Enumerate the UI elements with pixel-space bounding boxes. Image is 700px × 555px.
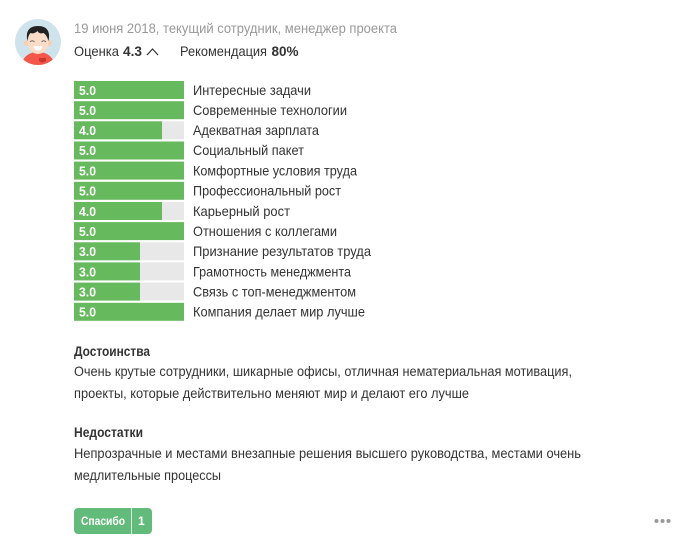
row: Профессиональный рост xyxy=(74,182,342,200)
row: Отношения с коллегами: 5.0 xyxy=(79,224,96,239)
row: Интересные задачи xyxy=(74,81,311,99)
row: Комфортные условия труда: 5.0 xyxy=(79,164,96,178)
rating summary: 4.3 xyxy=(123,43,142,59)
row: Современные технологии: Современные технологии xyxy=(193,102,347,118)
row: Признание результатов труда: Признание результатов труда xyxy=(193,243,371,259)
row: Карьерный рост: Карьерный рост xyxy=(193,203,291,219)
row: Грамотность менеджмента: Грамотность менеджмента xyxy=(193,264,351,280)
row: Интересные задачи: Интересные задачи xyxy=(193,82,311,98)
row: Адекватная зарплата: 4.0 xyxy=(79,123,96,138)
row: Признание результатов труда xyxy=(74,242,371,260)
row: Карьерный рост: 4.0 xyxy=(79,204,96,219)
row: Социальный пакет: 5.0 xyxy=(79,143,96,158)
text: disadvantages: Непрозрачные и местами внезапные решения высшего руководства, местами очень xyxy=(74,445,581,461)
row: Связь с топ-менеджментом xyxy=(74,283,356,301)
heading: advantages: Достоинства xyxy=(74,343,150,359)
recommendation summary: 80% xyxy=(272,43,299,59)
row: Адекватная зарплата: Адекватная зарплата xyxy=(193,122,319,138)
text: advantages: Очень крутые сотрудники, шикарные офисы, отличная нематериальная мотивация, xyxy=(74,363,572,379)
icon: chevron up xyxy=(147,49,158,55)
button: thanks: Спасибо xyxy=(81,514,125,528)
row: Признание результатов труда: 3.0 xyxy=(79,244,96,259)
row: Отношения с коллегами: Отношения с коллегами xyxy=(193,223,337,239)
button: thanks xyxy=(74,508,152,534)
rating bars chart xyxy=(74,81,371,321)
row: Компания делает мир лучше: 5.0 xyxy=(79,304,96,320)
row: Современные технологии xyxy=(74,101,347,119)
review meta line: 19 июня 2018, текущий сотрудник, менеджер проекта xyxy=(74,20,397,36)
row: Грамотность менеджмента: 3.0 xyxy=(79,264,96,280)
text: advantages: проекты, которые действительно меняют мир и делают его лучше xyxy=(74,385,469,401)
row: Социальный пакет xyxy=(74,142,305,160)
row: Связь с топ-менеджментом: 3.0 xyxy=(79,284,96,300)
row: Компания делает мир лучше xyxy=(74,303,365,321)
row: Комфортные условия труда xyxy=(74,162,357,180)
row: Интересные задачи: 5.0 xyxy=(79,83,96,98)
row: Современные технологии: 5.0 xyxy=(79,103,96,118)
row: Профессиональный рост: Профессиональный рост xyxy=(193,182,342,198)
row: Карьерный рост xyxy=(74,202,291,220)
row: Отношения с коллегами xyxy=(74,222,337,240)
row: Компания делает мир лучше: Компания делает мир лучше xyxy=(193,304,365,320)
icon: avatar xyxy=(15,19,61,66)
rating summary: Оценка xyxy=(74,43,119,59)
row: Связь с топ-менеджментом: Связь с топ-менеджментом xyxy=(193,284,356,300)
row: Грамотность менеджмента xyxy=(74,262,351,280)
row: Комфортные условия труда: Комфортные условия труда xyxy=(193,162,357,178)
recommendation summary: Рекомендация xyxy=(180,43,267,59)
rating summary xyxy=(74,43,158,59)
text: disadvantages: медлительные процессы xyxy=(74,467,221,483)
row: Профессиональный рост: 5.0 xyxy=(79,184,96,198)
row: Социальный пакет: Социальный пакет xyxy=(193,142,305,158)
heading: disadvantages: Недостатки xyxy=(74,424,143,440)
button: thanks: 1 xyxy=(138,514,145,528)
text: disadvantages xyxy=(74,445,581,483)
text: advantages xyxy=(74,363,572,401)
row: Адекватная зарплата xyxy=(74,121,319,139)
icon: more menu xyxy=(654,519,670,523)
